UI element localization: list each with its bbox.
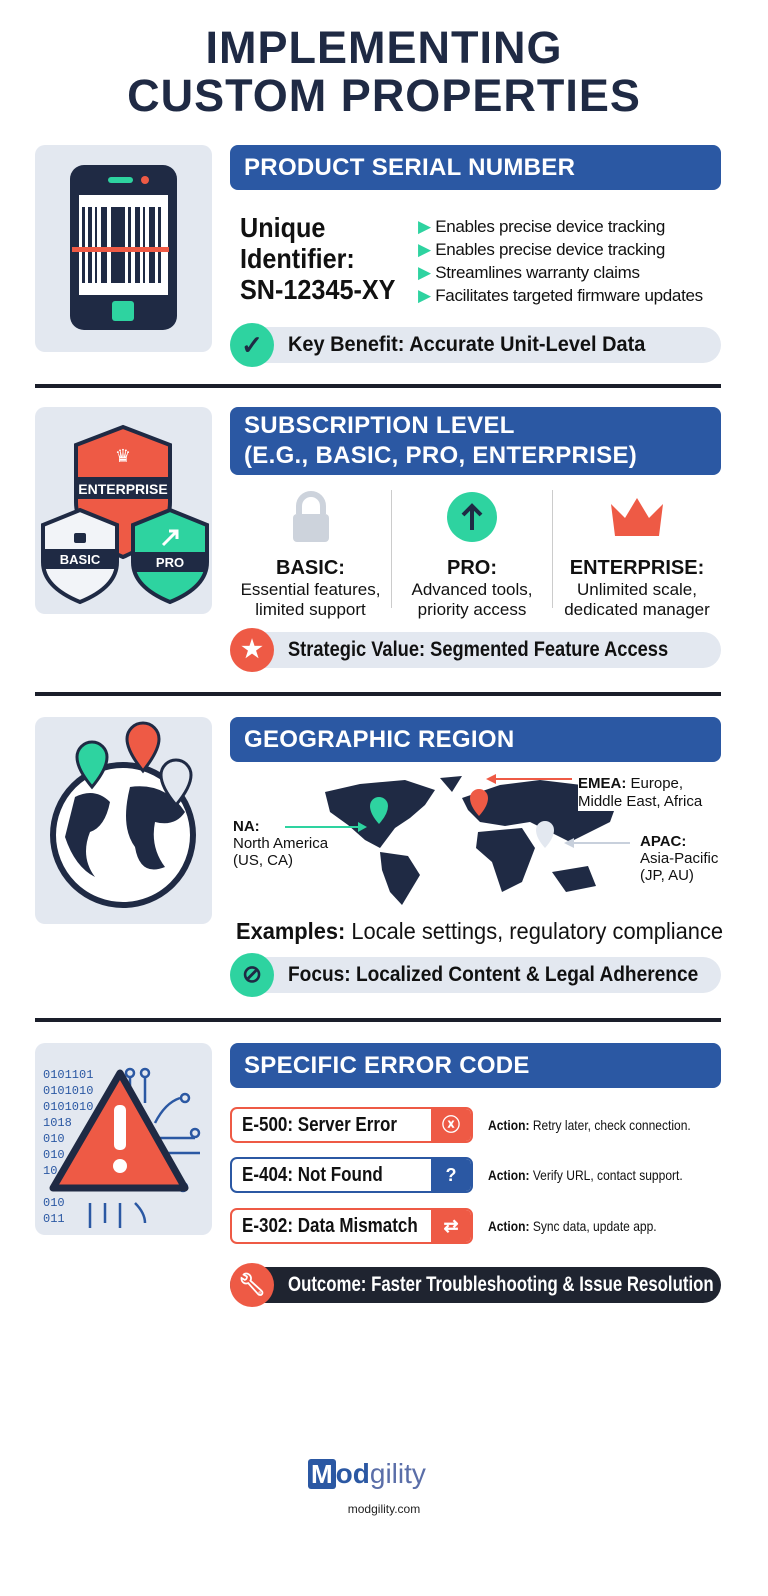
icon: shields xyxy=(41,424,209,604)
callout: key benefit: Key Benefit: Accurate Unit-Level Data xyxy=(288,333,645,356)
world map xyxy=(233,774,718,905)
text: unique identifier: Unique xyxy=(240,212,325,243)
tier: pro: PRO: xyxy=(447,557,497,579)
error rows: Action: Sync data, update app. xyxy=(488,1218,657,1234)
icon: shields: ♛ xyxy=(115,446,131,466)
header: subscription level: (E.G., BASIC, PRO, ENTERPRISE) xyxy=(244,442,637,469)
error rows: Action: Verify URL, contact support. xyxy=(488,1167,683,1183)
callout: strategic value: Strategic Value: Segmented Feature Access xyxy=(288,638,668,661)
header: product serial number: PRODUCT SERIAL NUMBER xyxy=(244,154,575,181)
text: unique identifier: SN-12345-XY xyxy=(240,274,395,305)
callout: outcome: 🔧︎ xyxy=(238,1272,266,1297)
icon: warning triangle with circuits: 10 xyxy=(43,1164,57,1178)
error: E-302: ⇄ xyxy=(443,1216,459,1236)
icon: shields: ENTERPRISE xyxy=(78,481,168,497)
error: E-500 xyxy=(230,1107,473,1143)
title xyxy=(127,22,641,121)
error: E-404: ? xyxy=(446,1165,456,1185)
error rows: Action: Retry later, check connection. xyxy=(488,1117,691,1133)
bullet list: ▶ Facilitates targeted firmware updates xyxy=(418,286,703,305)
callout: outcome: Outcome: Faster Troubleshooting & Issue Resolution xyxy=(288,1273,714,1296)
icon: warning triangle with circuits: 0101010 xyxy=(43,1084,93,1098)
tier: enterprise: Unlimited scale, xyxy=(577,580,697,599)
icon: warning triangle with circuits: 010 xyxy=(43,1132,65,1146)
title: IMPLEMENTING xyxy=(206,22,562,73)
icon: warning triangle with circuits: 011 xyxy=(43,1212,65,1226)
tier: basic xyxy=(241,491,380,619)
bullet list xyxy=(418,217,703,305)
panel: subscription icon xyxy=(35,407,212,614)
tier: basic: Essential features, xyxy=(241,580,380,599)
icon: warning triangle with circuits: 010 xyxy=(43,1148,65,1162)
icon: phone with barcode xyxy=(70,165,177,330)
header: subscription level xyxy=(230,407,721,475)
text: examples: Examples: Locale settings, regulatory compliance xyxy=(236,918,723,944)
icon: shields: BASIC xyxy=(60,552,101,567)
label: APAC: (JP, AU) xyxy=(640,867,694,884)
label: EMEA xyxy=(578,775,702,811)
text: unique identifier: Identifier: xyxy=(240,243,355,274)
tiers xyxy=(241,490,710,619)
label: APAC: APAC: xyxy=(640,833,686,850)
header: subscription level: SUBSCRIPTION LEVEL xyxy=(244,412,515,439)
tier: enterprise xyxy=(552,490,721,608)
bullet list: ▶ Enables precise device tracking xyxy=(418,217,665,236)
error: E-302 xyxy=(230,1208,473,1244)
header: geographic region xyxy=(230,717,721,762)
callout: focus: ⊘ xyxy=(242,961,262,988)
icon: warning triangle with circuits: 0101010 xyxy=(43,1100,93,1114)
icon: warning triangle with circuits: 0101101 xyxy=(43,1068,93,1082)
logo: odgility xyxy=(336,1458,426,1489)
header: specific error code: SPECIFIC ERROR CODE xyxy=(244,1052,530,1079)
label: EMEA: Middle East, Africa xyxy=(578,793,702,810)
error: E-404: E-404: Not Found xyxy=(242,1164,383,1186)
tier: pro: Advanced tools, xyxy=(412,580,532,599)
icon: warning triangle with circuits xyxy=(43,1068,200,1228)
icon: shields: PRO xyxy=(156,555,184,570)
icon: globe with pins xyxy=(50,722,196,908)
error rows xyxy=(230,1107,691,1244)
callout: focus: Focus: Localized Content & Legal Adherence xyxy=(288,963,698,986)
callout: key benefit: ✓ xyxy=(241,330,263,360)
bullet list: ▶ Enables precise device tracking xyxy=(418,240,665,259)
icon: warning triangle with circuits: 010 xyxy=(43,1196,65,1210)
icon: warning triangle with circuits: 1018 xyxy=(43,1116,72,1130)
panel: globe icon xyxy=(35,717,212,924)
label: APAC xyxy=(640,833,718,884)
title: CUSTOM PROPERTIES xyxy=(127,70,641,121)
label: NA xyxy=(233,818,328,869)
header: product serial number xyxy=(230,145,721,190)
text: unique identifier xyxy=(240,212,395,305)
tier: basic: limited support xyxy=(255,600,366,619)
tiers: priority access xyxy=(418,600,526,619)
label: NA: North America xyxy=(233,835,328,852)
error: E-500: E-500: Server Error xyxy=(242,1114,397,1136)
tier: pro xyxy=(391,490,552,608)
error: E-404 xyxy=(230,1157,473,1193)
tier: enterprise: ENTERPRISE: xyxy=(570,557,704,579)
bullet list: ▶ Streamlines warranty claims xyxy=(418,263,640,282)
header: specific error code xyxy=(230,1043,721,1088)
callout: key benefit xyxy=(230,327,721,363)
error: E-500: ⓧ xyxy=(442,1115,460,1135)
panel: serial icon xyxy=(35,145,212,352)
label: NA: (US, CA) xyxy=(233,852,293,869)
callout: strategic value: ★ xyxy=(241,636,263,663)
logo: M xyxy=(311,1459,333,1489)
label: APAC: Asia-Pacific xyxy=(640,850,718,867)
callout: outcome xyxy=(230,1267,721,1303)
url: modgility.com xyxy=(348,1502,420,1516)
panel: error icon xyxy=(35,1043,212,1235)
label: EMEA: EMEA: Europe, xyxy=(578,775,683,792)
tiers: dedicated manager xyxy=(564,600,710,619)
callout: strategic value xyxy=(230,632,721,668)
header: geographic region: GEOGRAPHIC REGION xyxy=(244,726,514,753)
callout: focus xyxy=(230,957,721,993)
label: NA: NA: xyxy=(233,818,260,835)
tier: basic: BASIC: xyxy=(276,557,345,579)
error: E-302: E-302: Data Mismatch xyxy=(242,1215,418,1237)
